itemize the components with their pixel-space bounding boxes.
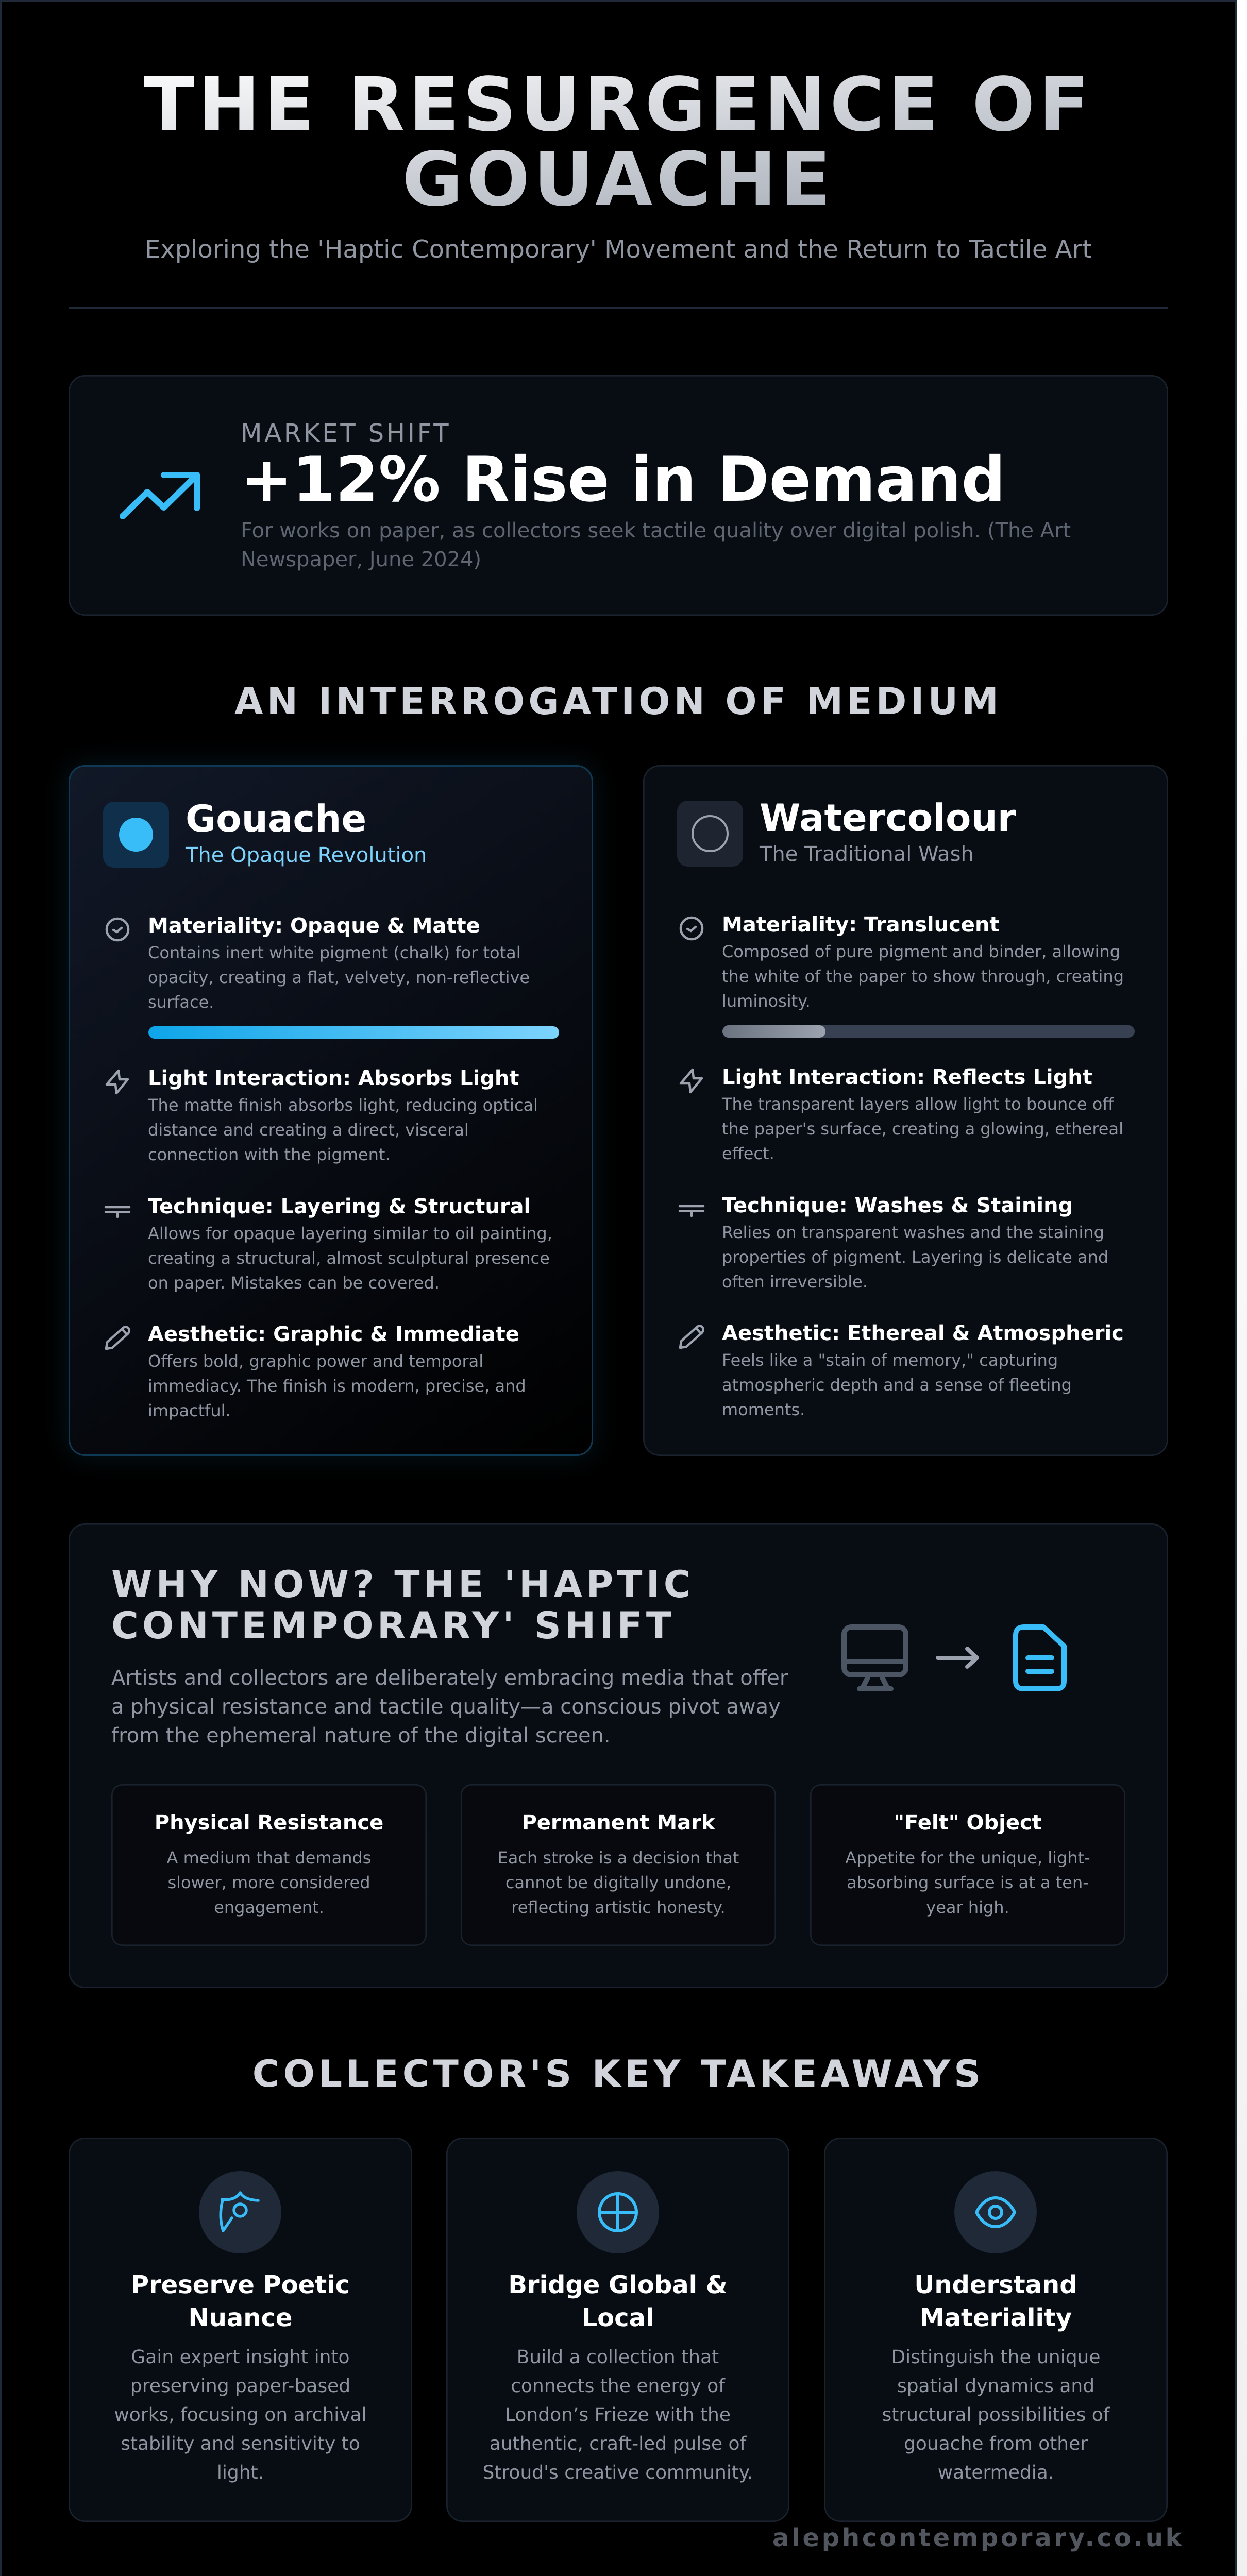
icon: eye (954, 2171, 1037, 2253)
icon: globe (577, 2171, 659, 2253)
aesthetic text: atmospheric depth and a sense of fleeting (722, 1375, 1072, 1394)
opacity bar (722, 1025, 1135, 1038)
materiality title: Materiality: Translucent (722, 913, 1000, 937)
aesthetic text (722, 1348, 1072, 1422)
card text: reflecting artistic honesty. (511, 1897, 726, 1917)
why now paragraph (111, 1664, 788, 1750)
title: GOUACHE (402, 136, 835, 223)
icon: layers (677, 1193, 708, 1224)
materiality title: Materiality: Opaque & Matte (148, 914, 480, 938)
card text (111, 1845, 427, 1920)
icon: pencil (105, 1326, 131, 1350)
item: light interaction (677, 1064, 1136, 1173)
card title (69, 2268, 412, 2334)
subtitle: Exploring the 'Haptic Contemporary' Movement and the Return to Tactile Art (145, 235, 1092, 264)
item: light interaction (105, 1066, 538, 1164)
light text (722, 1091, 1123, 1165)
icon: paper document (1012, 1624, 1068, 1691)
icon: layers (104, 1206, 131, 1218)
heading: an interrogation of medium: AN INTERROGATION OF MEDIUM (234, 680, 1002, 723)
item: aesthetic (677, 1320, 1136, 1429)
aesthetic title: Aesthetic: Graphic & Immediate (148, 1323, 519, 1346)
card text: watermedia. (938, 2462, 1054, 2483)
item: technique (104, 1195, 552, 1292)
icon: trending up arrow (120, 472, 200, 519)
gouache tagline: The Opaque Revolution (186, 843, 427, 867)
light text: the paper's surface, creating a glowing, ethereal (722, 1119, 1123, 1139)
card text: structural possibilities of (882, 2404, 1109, 2426)
card title: "Felt" Object (894, 1811, 1042, 1835)
watercolour name: Watercolour (760, 796, 1016, 839)
technique text: properties of pigment. Layering is delicate and (722, 1247, 1108, 1266)
technique text (722, 1220, 1108, 1294)
technique title: Technique: Layering & Structural (148, 1195, 531, 1218)
aesthetic text: Feels like a "stain of memory," capturing (722, 1350, 1058, 1369)
card text: connects the energy of (511, 2375, 725, 2397)
heading: collector's key takeaways: COLLECTOR'S KEY TAKEAWAYS (252, 2052, 984, 2095)
item: aesthetic (105, 1323, 526, 1420)
card text: engagement. (214, 1897, 324, 1917)
card text: Appetite for the unique, light- (845, 1848, 1090, 1868)
light text: The matte finish absorbs light, reducing optical (148, 1095, 538, 1115)
icon: solid circle (103, 802, 169, 868)
technique text (148, 1223, 552, 1292)
watercolour tagline: The Traditional Wash (760, 842, 974, 866)
panel: watercolour (643, 765, 1168, 1456)
card: felt object (810, 1784, 1125, 1946)
aesthetic text (148, 1351, 526, 1420)
technique text: creating a structural, almost sculptural presence (148, 1248, 550, 1267)
technique text: Allows for opaque layering similar to oil painting, (148, 1223, 552, 1243)
card title: Nuance (189, 2303, 292, 2332)
card text: A medium that demands (167, 1848, 371, 1868)
card title: Permanent Mark (521, 1811, 715, 1835)
aesthetic text: immediacy. The finish is modern, precise, and (148, 1376, 526, 1395)
card text: preserving paper-based (130, 2375, 350, 2397)
icon: monitor (836, 1619, 914, 1697)
card title: Local (582, 2303, 654, 2332)
card title (824, 2268, 1168, 2334)
card text (810, 1845, 1125, 1920)
card text: works, focusing on archival (114, 2404, 367, 2426)
stat description: For works on paper, as collectors seek tactile quality over digital polish. (The Art (241, 519, 1071, 543)
item: materiality (677, 912, 1136, 1041)
why now paragraph: from the ephemeral nature of the digital screen. (111, 1724, 611, 1748)
panel: market shift stat (69, 375, 1168, 616)
aesthetic title: Aesthetic: Ethereal & Atmospheric (722, 1321, 1124, 1345)
card text: light. (217, 2462, 264, 2483)
card text: Build a collection that (517, 2346, 719, 2368)
materiality text: opacity, creating a flat, velvety, non-reflective (148, 968, 530, 987)
card title: Preserve Poetic (131, 2270, 350, 2299)
card text: Distinguish the unique (891, 2346, 1101, 2368)
technique text: on paper. Mistakes can be covered. (148, 1273, 440, 1292)
materiality text: luminosity. (722, 991, 811, 1011)
light text (147, 1095, 538, 1164)
icon: pen nib (199, 2171, 281, 2253)
item: technique (677, 1193, 1136, 1301)
card text: Gain expert insight into (131, 2346, 350, 2368)
card text (824, 2343, 1168, 2487)
heading: why now: CONTEMPORARY' SHIFT (111, 1604, 675, 1647)
card title: Physical Resistance (155, 1811, 383, 1835)
item: materiality (105, 914, 559, 1039)
card title (446, 2268, 789, 2334)
materiality text: the white of the paper to show through, creating (722, 967, 1124, 986)
materiality text (722, 939, 1124, 1013)
card: permanent mark (461, 1784, 776, 1946)
aesthetic text: Offers bold, graphic power and temporal (148, 1351, 483, 1370)
card text: London’s Frieze with the (505, 2404, 731, 2426)
footer: website: alephcontemporary.co.uk (772, 2523, 1184, 2552)
card text: slower, more considered (167, 1873, 370, 1892)
icon: outlined circle (677, 801, 743, 867)
light title: Light Interaction: Absorbs Light (148, 1066, 519, 1090)
card text: cannot be digitally undone, (505, 1873, 731, 1892)
stat description (241, 519, 1071, 571)
opacity bar (148, 1026, 559, 1039)
light text: connection with the pigment. (148, 1145, 391, 1164)
heading: why now (111, 1564, 695, 1646)
light text: distance and creating a direct, visceral (148, 1120, 469, 1140)
card text (461, 1845, 776, 1920)
why now paragraph: Artists and collectors are deliberately embracing media that offer (111, 1666, 788, 1690)
heading: why now: WHY NOW? THE 'HAPTIC (111, 1563, 695, 1606)
card text: Each stroke is a decision that (498, 1848, 739, 1868)
card text: absorbing surface is at a ten- (847, 1873, 1089, 1892)
materiality text: Contains inert white pigment (chalk) for total (148, 943, 521, 962)
icon: check circle (105, 917, 130, 942)
why now paragraph: a physical resistance and tactile quality—a conscious pivot away (111, 1695, 781, 1719)
stat description: Newspaper, June 2024) (241, 548, 481, 571)
card text: stability and sensitivity to (121, 2433, 360, 2454)
icon: check circle (677, 912, 708, 943)
card: understand materiality (824, 2138, 1168, 2522)
technique text: often irreversible. (722, 1272, 868, 1291)
light text: effect. (722, 1144, 774, 1163)
icon: bolt (105, 1070, 129, 1094)
card text: gouache from other (904, 2433, 1088, 2454)
card text: year high. (926, 1897, 1009, 1917)
title (69, 67, 1168, 217)
technique title: Technique: Washes & Staining (722, 1194, 1073, 1217)
card title: Materiality (920, 2303, 1072, 2332)
aesthetic text: moments. (722, 1399, 805, 1419)
light text: The transparent layers allow light to bounce off (722, 1094, 1114, 1114)
card text (446, 2343, 789, 2487)
aesthetic text: impactful. (148, 1400, 231, 1420)
panel: why now (69, 1523, 1168, 1988)
light title: Light Interaction: Reflects Light (722, 1065, 1092, 1089)
materiality text: surface. (148, 992, 214, 1012)
card: preserve poetic nuance (69, 2138, 412, 2522)
panel: gouache (69, 765, 593, 1456)
card: bridge global and local (446, 2138, 789, 2522)
icon: pencil (677, 1320, 708, 1351)
materiality text (148, 943, 530, 1012)
card text: spatial dynamics and (897, 2375, 1094, 2397)
card title: Bridge Global & (508, 2270, 728, 2299)
stat: rise in demand: +12% Rise in Demand (241, 444, 1005, 516)
card text: Stroud's creative community. (482, 2462, 753, 2483)
icon: arrow (934, 1642, 981, 1673)
gouache name: Gouache (186, 797, 366, 840)
label: market shift: MARKET SHIFT (241, 419, 451, 448)
card text: authentic, craft-led pulse of (490, 2433, 746, 2454)
materiality text: Composed of pure pigment and binder, allowing (722, 942, 1120, 961)
icon: bolt (677, 1064, 708, 1095)
technique text: Relies on transparent washes and the staining (722, 1222, 1104, 1242)
card: physical resistance (111, 1784, 427, 1946)
card title: Understand (914, 2270, 1077, 2299)
card text (69, 2343, 412, 2487)
title: THE RESURGENCE OF (144, 61, 1093, 148)
